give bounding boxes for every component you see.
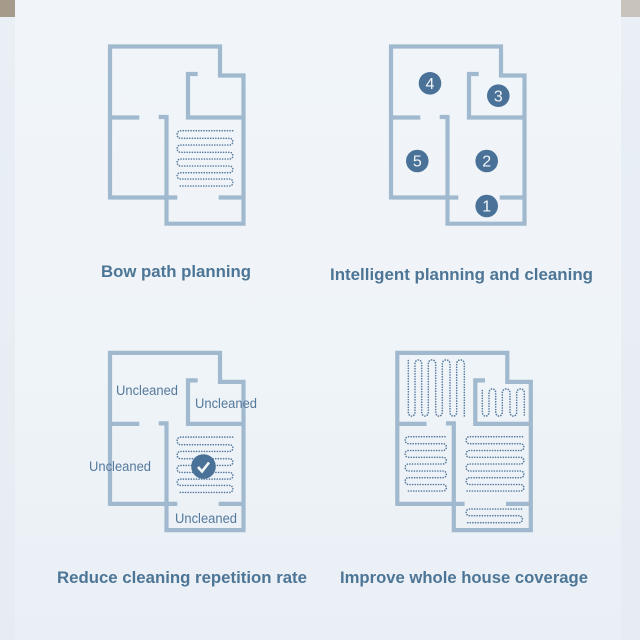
bow cleaning path (177, 437, 233, 492)
room number 3: 3 (494, 88, 503, 105)
room number 4 (419, 72, 441, 95)
wood strip right (621, 0, 640, 17)
floor plan 1 (110, 46, 244, 224)
path: top left room (408, 360, 464, 416)
room number 1 (475, 195, 498, 217)
path: left room (405, 437, 446, 491)
room number 4: 4 (426, 76, 435, 93)
room number 2 (475, 150, 498, 172)
path: entry (466, 509, 522, 523)
label: uncleaned room top left: Uncleaned (116, 383, 178, 398)
floor plan 2 (391, 46, 524, 224)
room number 1: 1 (482, 199, 491, 216)
heading: Intelligent planning and cleaning (330, 265, 593, 284)
label: uncleaned room left: Uncleaned (89, 459, 151, 474)
wood strip left (0, 0, 15, 17)
floor plan 3 (110, 353, 244, 530)
room number 5 (406, 150, 429, 172)
heading: Improve whole house coverage (340, 568, 588, 587)
panel: whole house coverage (340, 353, 588, 587)
room number 5: 5 (413, 154, 422, 171)
panel: bow path planning (101, 46, 251, 281)
label: uncleaned entry: Uncleaned (175, 511, 237, 526)
path: small room (482, 389, 524, 416)
heading: Reduce cleaning repetition rate (57, 568, 307, 587)
path: right room (466, 437, 524, 491)
panel: intelligent planning (330, 46, 593, 284)
icon: check badge (191, 454, 216, 479)
room number 3 (487, 84, 510, 107)
panel: reduce repetition (57, 353, 307, 587)
floor plan 4 (397, 353, 531, 530)
heading: Bow path planning (101, 262, 251, 281)
label: uncleaned small room: Uncleaned (195, 396, 257, 411)
room number 2: 2 (482, 154, 491, 171)
bow cleaning path (177, 131, 233, 186)
